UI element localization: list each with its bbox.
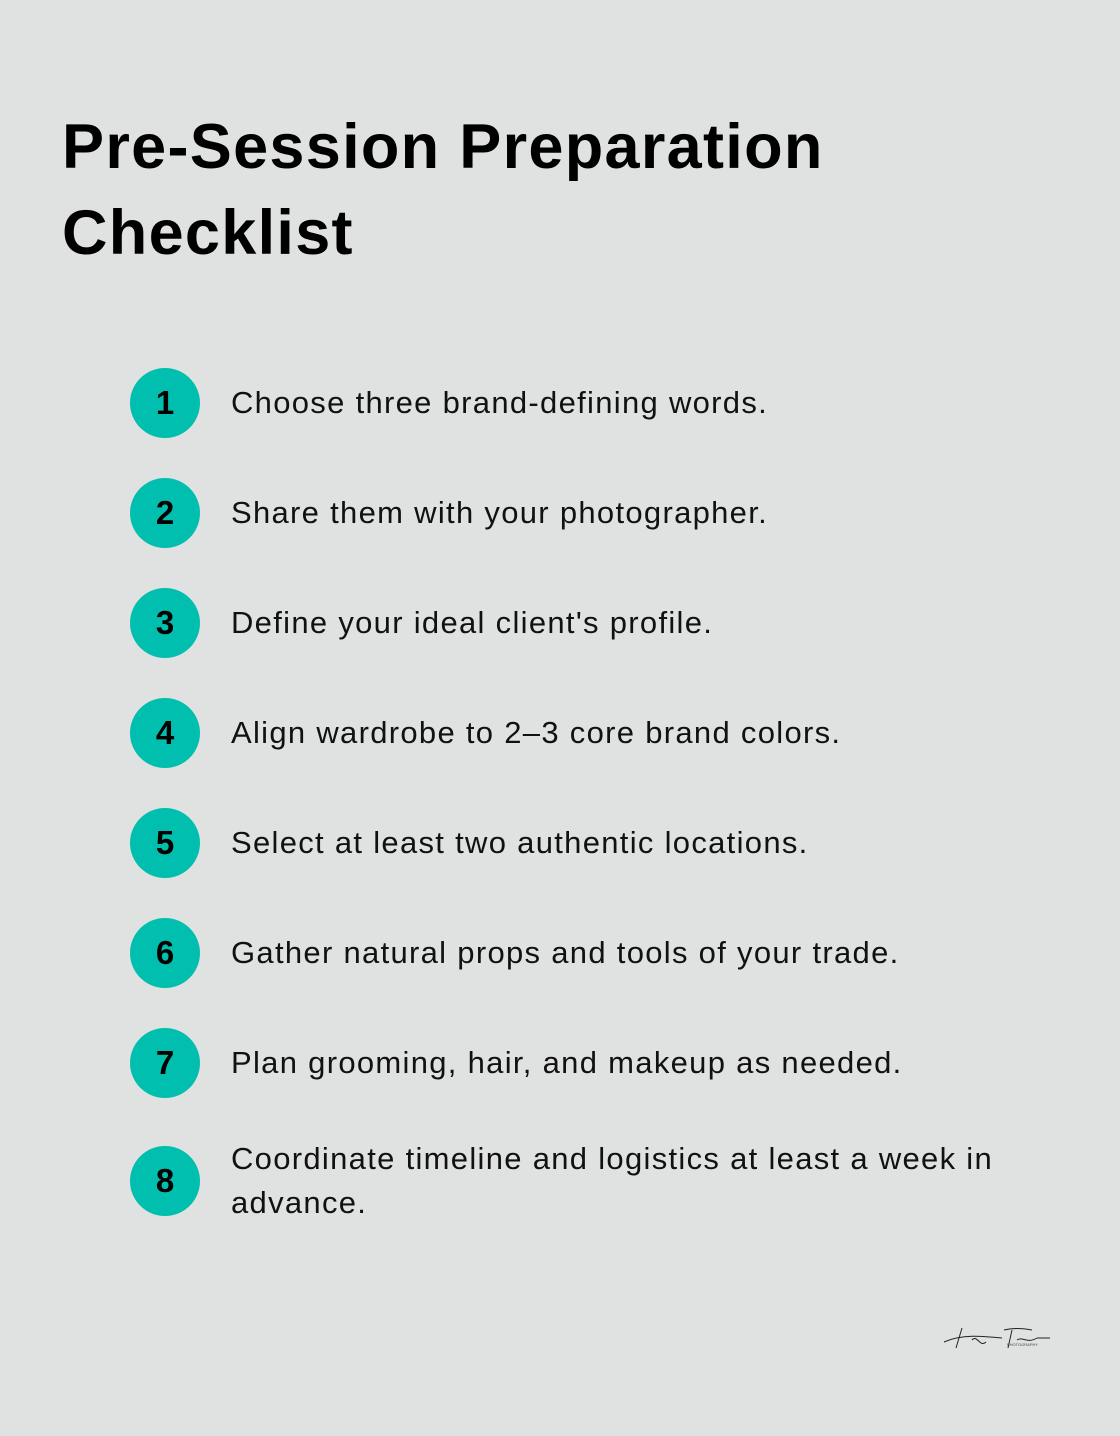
- item 3: Define your ideal client's profile.: [231, 605, 713, 640]
- item 6: Gather natural props and tools of your trade.: [231, 935, 900, 970]
- title: Pre-Session Preparation: [62, 112, 824, 182]
- item 2: 2: [156, 494, 174, 531]
- item 5: 5: [156, 824, 174, 861]
- item 4: [130, 698, 841, 768]
- signature logo: PHOTOGRAPHY: [1007, 1342, 1038, 1347]
- item 8: Coordinate timeline and logistics at least a week in advance.: [231, 1141, 993, 1220]
- item 5: [130, 808, 809, 878]
- item 3: 3: [156, 604, 174, 641]
- item 7: Plan grooming, hair, and makeup as needed.: [231, 1045, 903, 1080]
- title: Checklist: [62, 198, 354, 268]
- title: [62, 112, 824, 268]
- item 4: 4: [156, 714, 174, 751]
- item 2: [130, 478, 768, 548]
- item 3: [130, 588, 713, 658]
- item 7: 7: [156, 1044, 174, 1081]
- item 6: 6: [156, 934, 174, 971]
- signature logo: [944, 1328, 1050, 1348]
- item 1: 1: [156, 384, 174, 421]
- item 1: [130, 368, 768, 438]
- item 5: Select at least two authentic locations.: [231, 825, 809, 860]
- item 4: Align wardrobe to 2–3 core brand colors.: [231, 715, 841, 750]
- item 7: [130, 1028, 903, 1098]
- item 1: Choose three brand-defining words.: [231, 385, 768, 420]
- item 2: Share them with your photographer.: [231, 495, 768, 530]
- item 6: [130, 918, 900, 988]
- item 8: 8: [156, 1162, 174, 1199]
